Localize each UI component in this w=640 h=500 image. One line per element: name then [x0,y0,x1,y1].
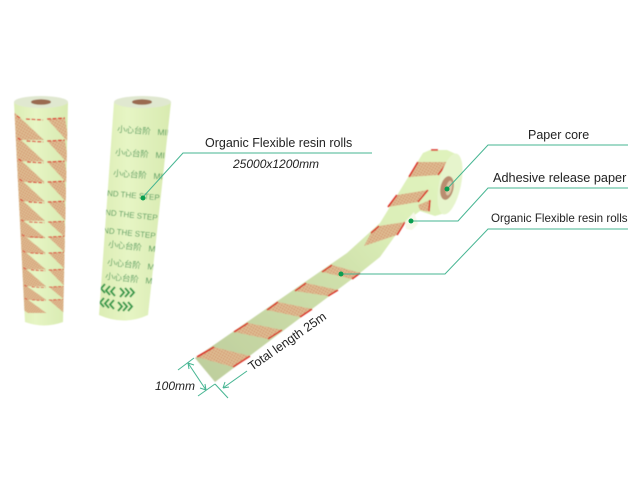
strip bands [197,150,448,367]
left roll core [31,99,51,105]
roll printed text: 小心台阶 MIND [105,271,167,287]
roll printed text: 小心台阶 MIND [117,124,179,138]
roll printed text: 小心台阶 MIND [108,239,170,255]
dimension: total length: Total length 25m [246,309,329,373]
left roll: printed side [14,96,69,326]
roll printed text [104,124,169,284]
flat strip and roll body [195,150,462,382]
callout: organic flexible rolls (left): 25000x1200mm [232,157,319,171]
left roll top face [14,96,68,108]
callout: paper core: Paper core [528,128,589,142]
adhesive release paper tab [405,212,418,230]
right roll: green text side [98,96,172,321]
roll printed text: 小心台阶 MIND [115,147,177,161]
dimension: width 100mm: 100mm [155,379,195,393]
callout: organic flexible rolls (left): Organic Flexible resin rolls [205,136,352,150]
roll printed text: 小心台阶 MIND [113,168,175,182]
callout: organic flexible resin rolls (right) [338,212,628,276]
paper core end [438,175,456,201]
callout: adhesive release paper [408,171,628,224]
roll printed text: MIND THE STEP [96,207,158,222]
roll printed text: MIND THE STEP [98,188,160,202]
callout: adhesive release paper: Adhesive release paper [493,171,627,185]
callout: organic flexible rolls (left) [140,136,372,200]
right roll top face [114,96,171,108]
roll printed text: MIND THE STEP [94,225,156,240]
chevron arrows [100,284,134,311]
dimension: width 100mm [155,358,215,396]
dimension: total length [215,309,329,398]
callout: organic flexible resin rolls (right): Organic Flexible resin rolls [491,212,628,225]
roll printed text: 小心台阶 MIND [107,257,169,273]
callout: paper core [444,128,628,192]
unrolled strip [195,150,467,382]
right roll core [132,99,152,105]
roll end face [433,151,467,217]
